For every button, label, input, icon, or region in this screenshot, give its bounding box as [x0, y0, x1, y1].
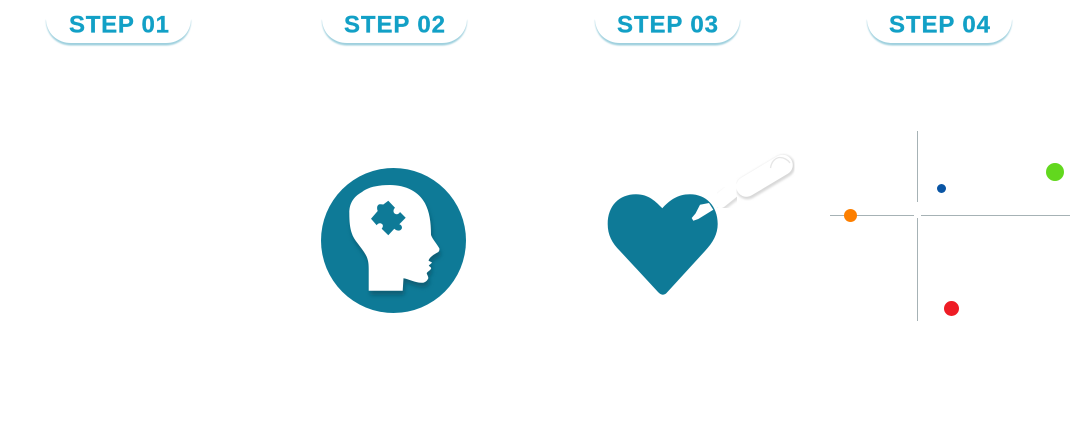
icon: head with puzzle piece — [321, 168, 466, 313]
step 1 label: STEP 01 — [69, 12, 169, 38]
step 4 label: STEP 04 — [889, 12, 991, 38]
chart: positioning map — [830, 131, 1070, 321]
pen clip ring — [770, 158, 790, 168]
dot: blue — [937, 184, 946, 193]
puzzle piece — [371, 201, 406, 235]
pen tip — [692, 203, 713, 221]
dot: green — [1046, 163, 1064, 181]
pen barrel — [746, 165, 782, 186]
step 4 badge — [867, 0, 1012, 46]
vertical axis — [916, 131, 918, 321]
horizontal axis — [830, 214, 1070, 216]
head silhouette — [349, 185, 439, 291]
icon: heart with marker pen — [608, 158, 790, 295]
step 3 label: STEP 03 — [617, 12, 718, 38]
pen small section — [720, 191, 732, 201]
pen barrel shadow — [748, 166, 784, 188]
step 3 badge — [595, 0, 740, 46]
dot: red — [944, 301, 959, 316]
heart — [608, 194, 718, 295]
step 1 badge — [46, 0, 191, 46]
pen small section shadow — [721, 193, 733, 202]
step 2 label: STEP 02 — [344, 12, 445, 38]
step 2 badge — [322, 0, 467, 46]
dot: orange — [844, 209, 857, 222]
